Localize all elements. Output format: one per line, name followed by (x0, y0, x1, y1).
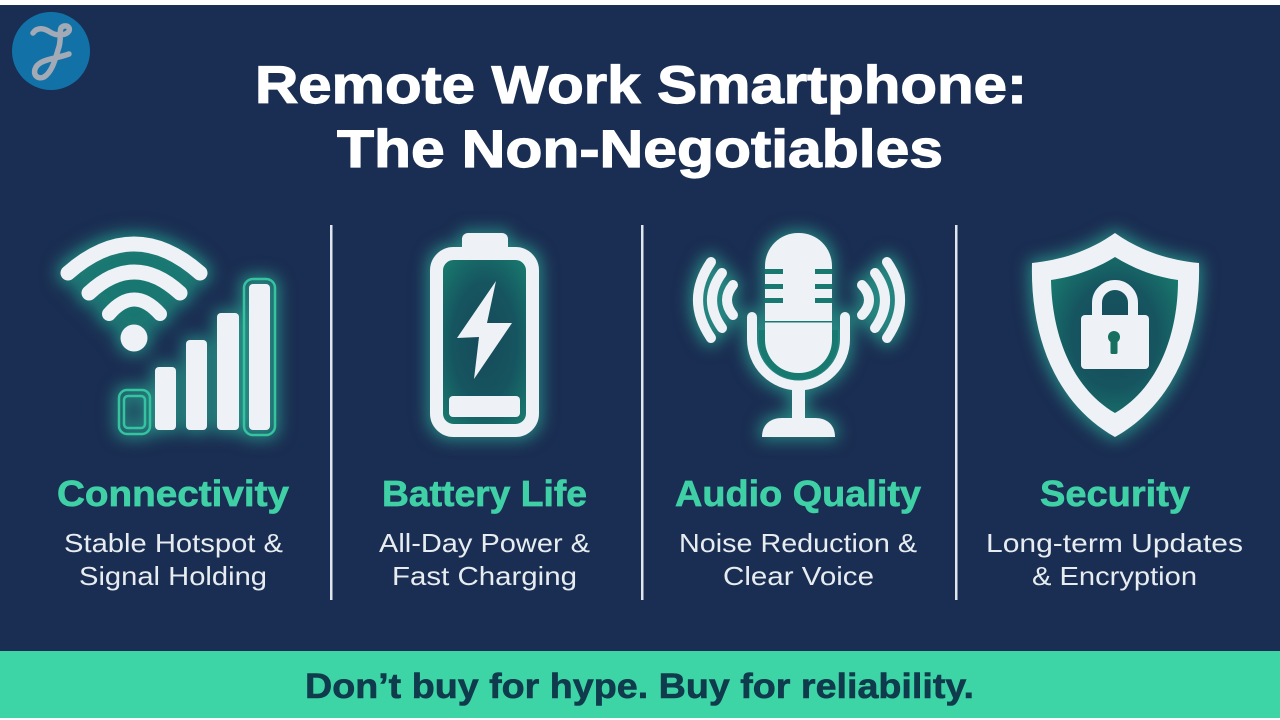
description: connectivity: Signal Holding (79, 561, 267, 591)
description: audio quality: Clear Voice (723, 561, 874, 591)
footer banner: Don’t buy for hype. Buy for reliability. (305, 667, 974, 706)
heading: connectivity: Connectivity (57, 473, 289, 514)
icon: wifi and signal bars (68, 243, 275, 435)
description: battery life: Fast Charging (392, 561, 577, 591)
panel: battery life (379, 233, 590, 591)
column dividers (330, 225, 958, 600)
logo badge (12, 12, 90, 90)
panel: audio quality (675, 233, 921, 591)
description: audio quality: Noise Reduction & (679, 528, 917, 558)
description: battery life: All-Day Power & (379, 528, 590, 558)
title: The Non-Negotiables (337, 120, 943, 179)
panel: connectivity (57, 243, 289, 591)
footer banner (0, 651, 1280, 718)
description: connectivity (64, 528, 283, 591)
heading: security: Security (1040, 473, 1190, 514)
icon: microphone with sound waves (698, 233, 900, 437)
panel: security (986, 233, 1243, 591)
description: security (986, 528, 1243, 591)
description: battery life (379, 528, 590, 591)
title (255, 56, 1027, 179)
heading: battery life: Battery Life (382, 473, 587, 514)
description: audio quality (679, 528, 917, 591)
title: Remote Work Smartphone: (255, 56, 1027, 115)
heading: audio quality: Audio Quality (675, 473, 921, 514)
icon: battery with bolt (436, 233, 532, 430)
icon: shield with padlock (1032, 233, 1199, 437)
description: security: Long-term Updates (986, 528, 1243, 558)
description: security: & Encryption (1032, 561, 1197, 591)
description: connectivity: Stable Hotspot & (64, 528, 283, 558)
